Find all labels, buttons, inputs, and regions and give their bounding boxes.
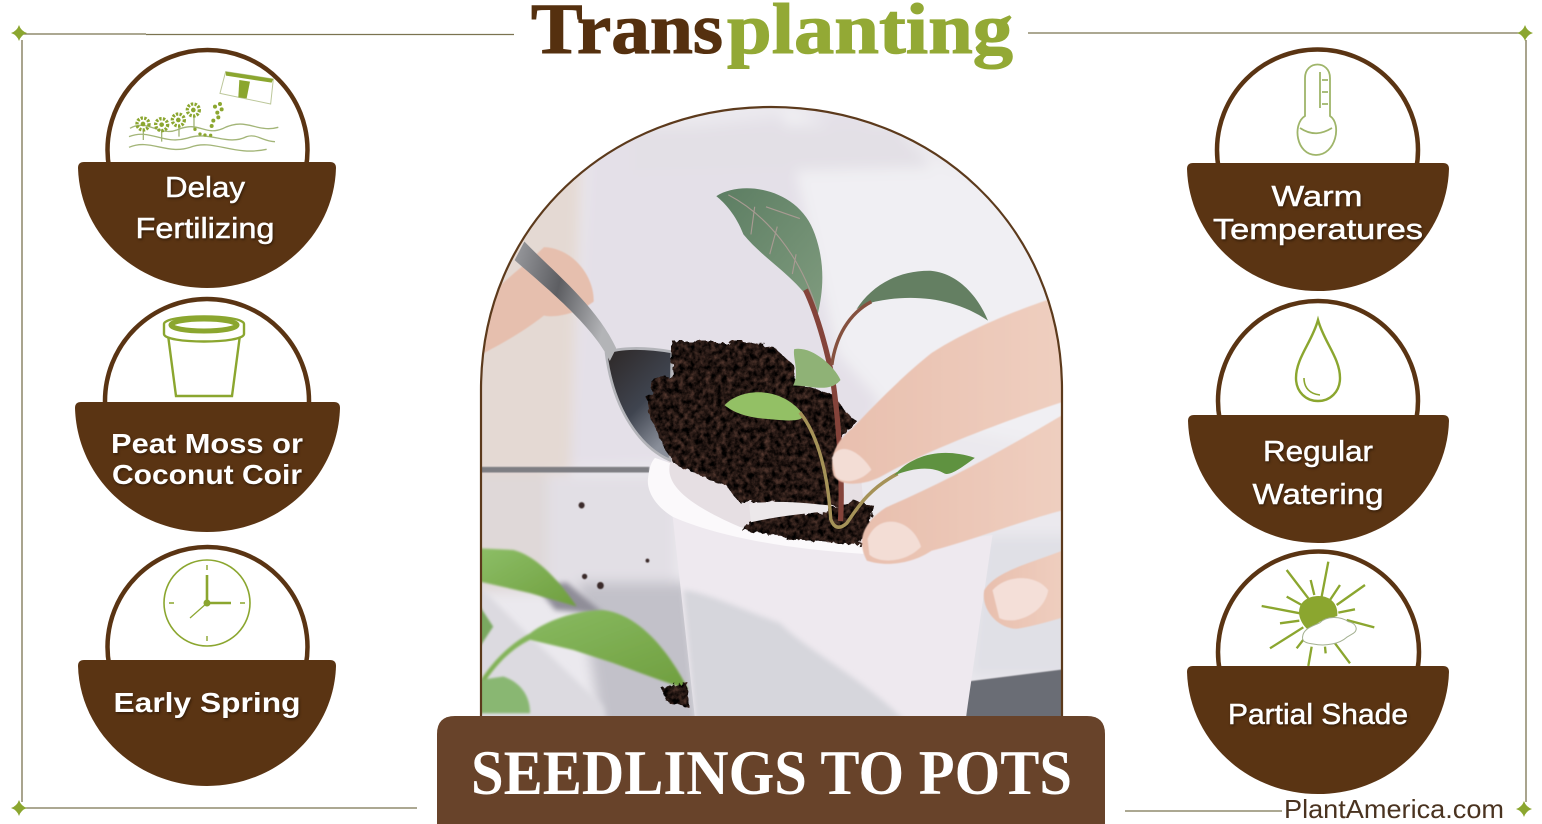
panel: central arched photo xyxy=(480,106,1064,716)
leaf: small light xyxy=(793,349,840,388)
lower soil xyxy=(740,500,875,545)
seedling right leaf xyxy=(894,453,975,476)
seedling stem xyxy=(800,412,898,527)
panel: partial shade xyxy=(1187,552,1449,794)
pot shadow xyxy=(683,590,905,721)
icon: pot xyxy=(164,316,244,396)
index finger xyxy=(832,294,1067,484)
label xyxy=(1213,181,1423,246)
label xyxy=(136,172,274,245)
icon: fertilizer box and flowers xyxy=(129,72,278,151)
white dish xyxy=(482,593,606,716)
banner: seedlings to pots xyxy=(437,716,1105,824)
label: Regular xyxy=(1263,436,1373,468)
leaf stem xyxy=(832,302,871,365)
corner ornament: top left xyxy=(11,25,27,41)
icon: sun and cloud xyxy=(1262,562,1374,666)
banner: seedlings to pots: SEEDLINGS TO POTS xyxy=(471,737,1072,808)
panel: regular watering xyxy=(1188,301,1449,543)
label: Early Spring xyxy=(114,687,300,718)
pot body xyxy=(673,517,993,721)
photo background xyxy=(482,108,1061,716)
spoon handle xyxy=(515,242,616,361)
label xyxy=(111,428,303,490)
seedling leaf xyxy=(725,392,803,420)
label: Fertilizing xyxy=(136,213,274,245)
label: Peat Moss or xyxy=(111,428,303,459)
label: Warm xyxy=(1272,181,1362,213)
label: Watering xyxy=(1252,479,1384,511)
panel: delay fertilizing xyxy=(78,50,336,288)
spoon bowl xyxy=(606,348,672,460)
leaf: right xyxy=(856,271,988,321)
icon: water drop xyxy=(1296,320,1340,401)
panel: warm temperatures xyxy=(1187,50,1449,291)
ring finger xyxy=(984,549,1067,629)
soil xyxy=(647,342,856,507)
arch outline xyxy=(481,107,1062,716)
corner ornament: bottom left xyxy=(11,800,27,816)
panel: peat moss or coconut coir xyxy=(75,299,340,532)
website credit: PlantAmerica.com xyxy=(1284,794,1504,824)
label: Delay xyxy=(165,172,246,204)
panel: early spring xyxy=(78,547,336,786)
blurred leaves at lower left xyxy=(480,548,688,713)
leaf veins xyxy=(728,195,817,310)
white strip in pot xyxy=(749,502,828,522)
label: Partial Shade xyxy=(1228,699,1408,731)
soil specks on table xyxy=(579,502,649,589)
icon: clock xyxy=(164,560,250,646)
title xyxy=(531,0,1013,69)
shadow under leaf xyxy=(536,582,604,614)
corner ornament: bottom right xyxy=(1516,801,1532,817)
label: Temperatures xyxy=(1213,214,1423,246)
icon: thermometer xyxy=(1297,64,1336,155)
dark table area xyxy=(966,669,1061,716)
middle finger xyxy=(862,412,1067,564)
main stem xyxy=(805,290,841,521)
pot inside xyxy=(670,464,863,543)
leaf: large top xyxy=(716,188,822,314)
label: Coconut Coir xyxy=(112,459,302,490)
right hand fingers xyxy=(832,294,1067,629)
pot rim xyxy=(648,458,863,554)
left hand xyxy=(480,247,594,355)
soil crumbs xyxy=(663,681,691,709)
corner ornament: top right xyxy=(1517,25,1533,41)
table edge xyxy=(476,467,649,472)
label xyxy=(1252,436,1384,511)
